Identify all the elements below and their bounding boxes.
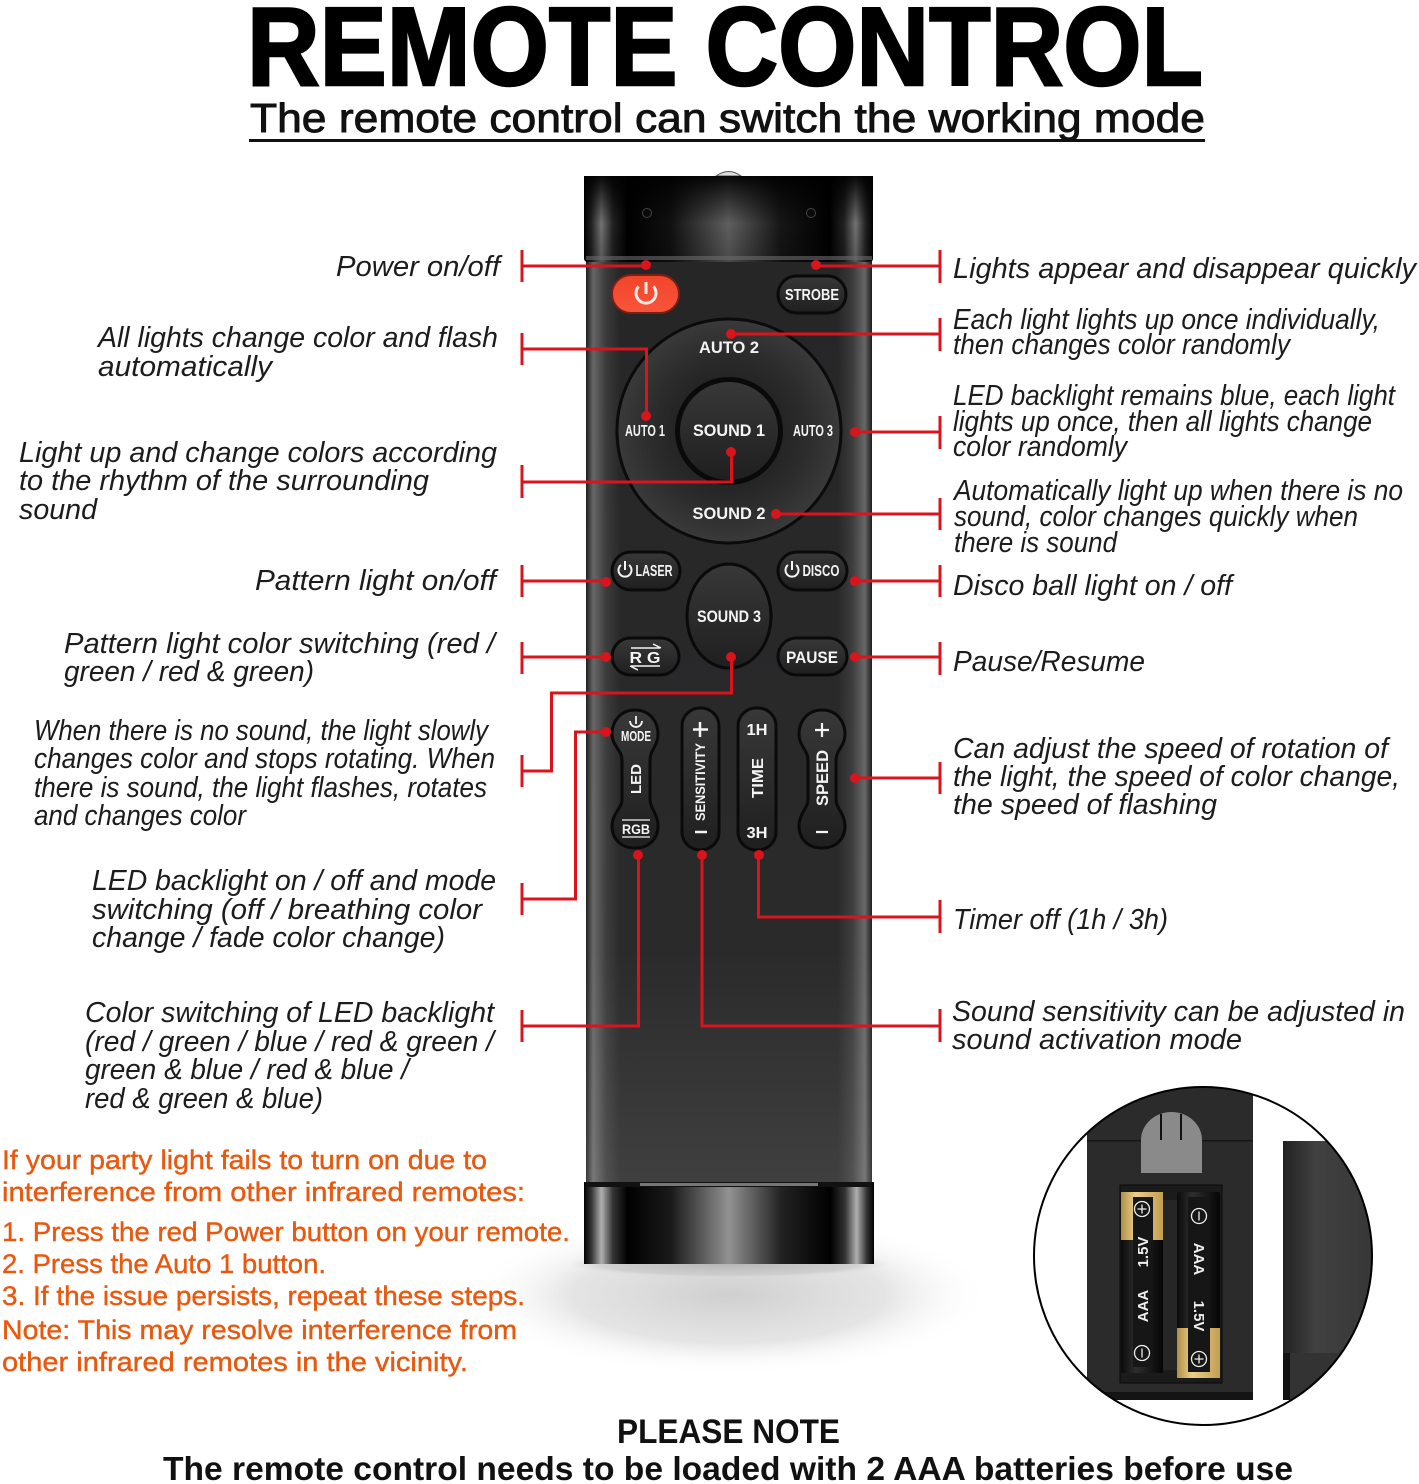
label: pattern colour: Pattern light color switching (red / bbox=[64, 628, 498, 660]
R G switch button: R G bbox=[630, 650, 660, 667]
remote bottom cap bbox=[584, 1182, 874, 1264]
label: strobe: Lights appear and disappear quickly bbox=[953, 253, 1417, 285]
right battery: AAA bbox=[1190, 1243, 1207, 1275]
control ring bbox=[617, 319, 841, 543]
control ring: SOUND 1 bbox=[693, 421, 765, 440]
troubleshooting note: other infrared remotes in the vicinity. bbox=[2, 1347, 468, 1377]
label: pattern colour bbox=[64, 628, 498, 688]
label: auto 1: All lights change color and flash bbox=[96, 322, 498, 354]
right battery: 1.5V bbox=[1190, 1301, 1207, 1331]
speed capsule: SPEED bbox=[814, 750, 832, 806]
left leader lines bbox=[522, 250, 736, 1042]
time capsule bbox=[738, 708, 776, 850]
label: disco: Disco ball light on / off bbox=[953, 570, 1235, 602]
label: LED colour: (red / green / blue / red & green / bbox=[85, 1026, 497, 1058]
laser button bbox=[612, 552, 680, 590]
label: auto 3: color randomly bbox=[953, 431, 1128, 463]
label: sensitivity bbox=[952, 996, 1405, 1056]
sensitivity capsule: SENSITIVITY bbox=[693, 743, 708, 821]
label: speed bbox=[953, 733, 1400, 821]
disco button bbox=[778, 552, 847, 590]
label: sound 1: to the rhythm of the surrounding bbox=[19, 465, 429, 497]
label: sound 3: changes color and stops rotating. When bbox=[34, 743, 495, 775]
speed capsule bbox=[799, 710, 845, 848]
label: speed: the speed of flashing bbox=[953, 789, 1217, 821]
label: sound 3 bbox=[34, 715, 495, 832]
pause button: PAUSE bbox=[786, 648, 838, 667]
right leader lines bbox=[697, 250, 940, 1042]
label: pattern colour: green / red & green) bbox=[64, 656, 314, 688]
label: LED mode: change / fade color change) bbox=[92, 922, 445, 954]
label: auto 2 bbox=[953, 304, 1380, 361]
label: sound 1 bbox=[19, 437, 497, 526]
R G switch button bbox=[612, 638, 679, 675]
please note heading: PLEASE NOTE bbox=[617, 1413, 840, 1451]
label: auto 3 bbox=[953, 380, 1397, 463]
label: sound 3: When there is no sound, the light slowly bbox=[34, 715, 489, 747]
laser button: LASER bbox=[636, 563, 673, 580]
troubleshooting note: 3. If the issue persists, repeat these steps. bbox=[2, 1281, 525, 1311]
right battery bbox=[1177, 1192, 1220, 1378]
time capsule: TIME bbox=[750, 758, 767, 798]
remote side view bbox=[1283, 1141, 1371, 1400]
label: sound 1: Light up and change colors according bbox=[19, 437, 497, 469]
label: laser: Pattern light on/off bbox=[255, 565, 499, 597]
remote top cap bbox=[584, 172, 873, 262]
disco button: DISCO bbox=[802, 563, 840, 580]
troubleshooting note: If your party light fails to turn on due to bbox=[2, 1145, 487, 1175]
strobe button bbox=[778, 276, 846, 313]
label: timer: Timer off (1h / 3h) bbox=[953, 904, 1168, 936]
label: sensitivity: sound activation mode bbox=[952, 1024, 1242, 1056]
time capsule: 3H bbox=[746, 825, 768, 842]
sound 3 button bbox=[687, 564, 771, 668]
LED capsule bbox=[612, 710, 658, 848]
sensitivity capsule bbox=[682, 708, 719, 850]
label: LED colour: red & green & blue) bbox=[85, 1083, 323, 1115]
pause button bbox=[778, 638, 847, 675]
remote control bbox=[584, 172, 874, 1264]
control ring: AUTO 1 bbox=[625, 423, 665, 440]
troubleshooting note bbox=[2, 1145, 570, 1377]
label: sound 3: there is sound, the light flashes, rotates bbox=[34, 772, 487, 804]
troubleshooting note: 1. Press the red Power button on your remote. bbox=[2, 1217, 570, 1247]
label: LED mode: switching (off / breathing color bbox=[92, 894, 483, 926]
troubleshooting note: 2. Press the Auto 1 button. bbox=[2, 1249, 326, 1279]
troubleshooting note: Note: This may resolve interference from bbox=[2, 1315, 517, 1345]
label: LED colour: Color switching of LED backlight bbox=[85, 997, 496, 1029]
label: auto 1 bbox=[96, 322, 498, 383]
label: auto 3: lights up once, then all lights change bbox=[953, 406, 1372, 438]
troubleshooting note: interference from other infrared remotes: bbox=[2, 1177, 525, 1207]
label: sound 2: there is sound bbox=[954, 527, 1118, 559]
LED capsule: RGB bbox=[622, 821, 650, 837]
label: LED colour: green & blue / red & blue / bbox=[85, 1054, 412, 1086]
label: sound 1: sound bbox=[19, 494, 98, 526]
label: LED mode: LED backlight on / off and mode bbox=[92, 865, 496, 897]
label: auto 2: then changes color randomly bbox=[953, 329, 1291, 361]
left battery: AAA bbox=[1135, 1290, 1152, 1322]
remote body bbox=[586, 250, 872, 1186]
label: sound 2 bbox=[952, 475, 1403, 559]
left battery: 1.5V bbox=[1135, 1237, 1152, 1267]
control ring: AUTO 3 bbox=[793, 423, 833, 440]
label: speed: Can adjust the speed of rotation of bbox=[953, 733, 1391, 765]
label: LED mode bbox=[92, 865, 496, 954]
label: speed: the light, the speed of color change, bbox=[953, 761, 1400, 793]
strobe button: STROBE bbox=[785, 287, 839, 304]
LED capsule: LED bbox=[628, 764, 645, 794]
label: sound 2: sound, color changes quickly when bbox=[954, 501, 1358, 533]
control ring: AUTO 2 bbox=[699, 338, 759, 357]
label: pause: Pause/Resume bbox=[953, 646, 1145, 678]
label: LED colour bbox=[85, 997, 497, 1115]
label: sound 3: and changes color bbox=[34, 800, 247, 832]
control ring: SOUND 2 bbox=[692, 504, 766, 523]
floor shadow bbox=[467, 1215, 991, 1375]
battery inset circle bbox=[1034, 1080, 1393, 1425]
sound 3 button: SOUND 3 bbox=[697, 608, 761, 626]
label: sensitivity: Sound sensitivity can be adjusted in bbox=[952, 996, 1405, 1028]
left battery bbox=[1121, 1192, 1163, 1373]
remote back with compartment bbox=[1087, 1080, 1253, 1400]
LED capsule: MODE bbox=[621, 728, 651, 745]
label: power: Power on/off bbox=[336, 251, 503, 283]
subtitle: The remote control can switch the working mode bbox=[250, 95, 1205, 141]
label: auto 2: Each light lights up once individually, bbox=[953, 304, 1380, 336]
time capsule: 1H bbox=[746, 722, 768, 739]
power button bbox=[612, 275, 679, 313]
label: auto 1: automatically bbox=[98, 351, 274, 383]
